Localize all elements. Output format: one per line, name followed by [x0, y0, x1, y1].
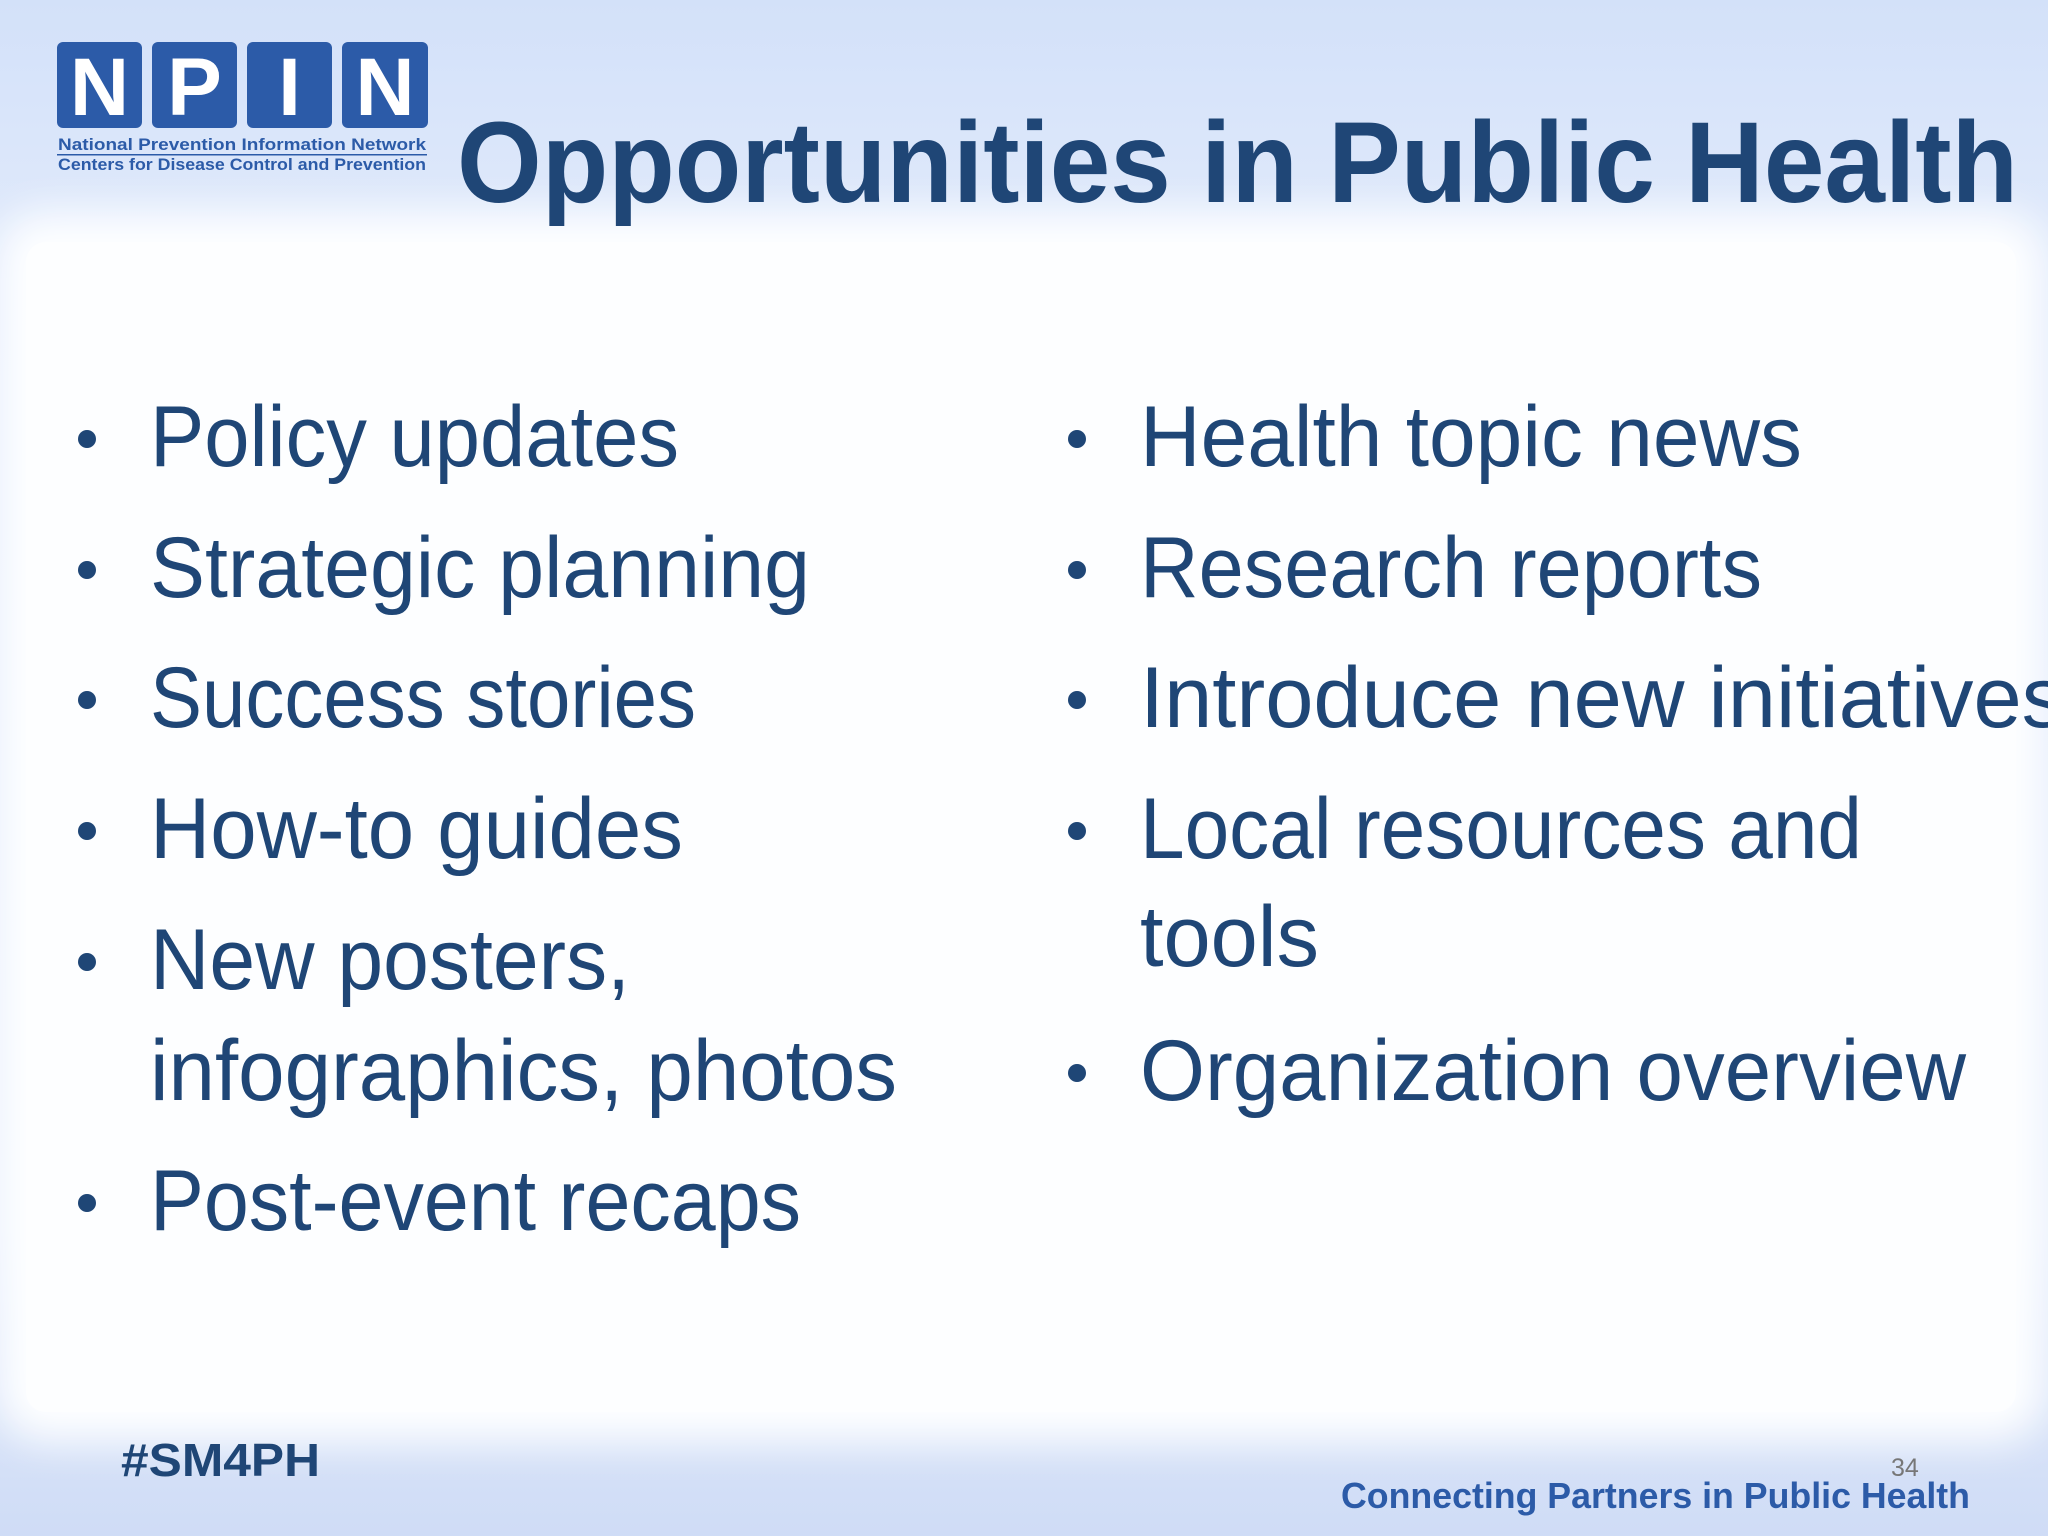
left bullet list: Strategic planning	[150, 520, 810, 616]
right bullet list: Local resources and	[1140, 781, 1862, 877]
tagline: Connecting Partners in Public Health	[1341, 1475, 1970, 1516]
hashtag footer: #SM4PH	[121, 1434, 320, 1486]
left bullet list	[78, 389, 897, 1249]
right bullet list: Health topic news	[1140, 389, 1802, 485]
logo: NPIN: National Prevention Information Network	[58, 135, 427, 154]
left bullet list: Post-event recaps	[150, 1153, 801, 1249]
logo: NPIN: N	[70, 42, 129, 133]
left bullet list: infographics, photos	[150, 1023, 897, 1119]
left bullet list: Policy updates	[150, 389, 679, 485]
right bullet list: tools	[1140, 889, 1319, 985]
logo: NPIN: N	[355, 42, 415, 133]
logo: NPIN: I	[278, 42, 301, 133]
right bullet list: Research reports	[1140, 520, 1762, 616]
logo: NPIN	[57, 42, 428, 174]
left bullet list: How-to guides	[150, 781, 683, 877]
left bullet list: Success stories	[150, 650, 696, 746]
left bullet list: New posters,	[150, 912, 630, 1008]
right bullet list	[1068, 389, 2048, 1119]
right bullet list: Introduce new initiatives	[1140, 650, 2048, 746]
slide number: 34	[1891, 1454, 1919, 1482]
right bullet list: Organization overview	[1140, 1023, 1967, 1119]
logo: NPIN: Centers for Disease Control and Prevention	[58, 155, 426, 174]
logo: NPIN: P	[167, 42, 222, 133]
